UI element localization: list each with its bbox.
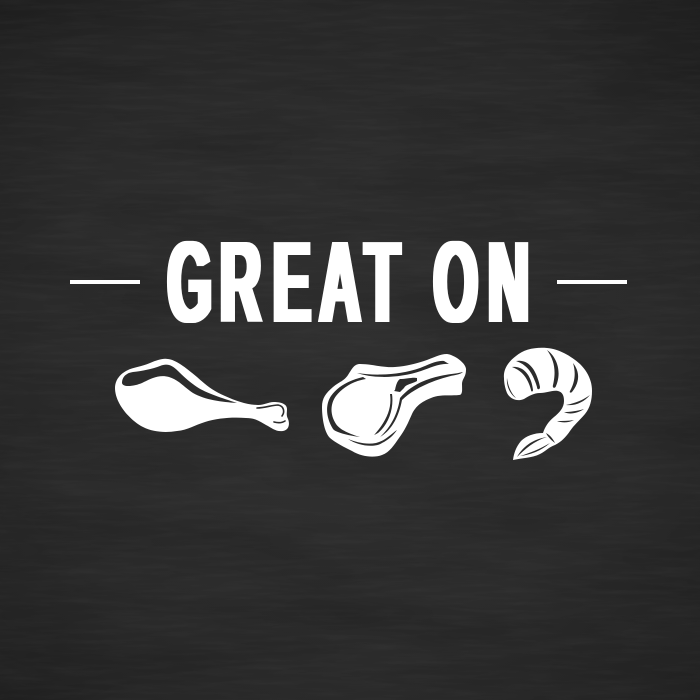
title: E — [273, 218, 311, 347]
title: O — [434, 218, 478, 347]
shrimp shell segments — [507, 350, 590, 457]
right rule — [557, 280, 627, 284]
title: G — [168, 218, 212, 347]
title: A — [319, 218, 361, 347]
title: N — [488, 218, 529, 347]
steak fat lines — [327, 361, 463, 446]
chicken joint lines — [257, 405, 285, 423]
icon: chicken drumstick — [115, 359, 289, 432]
title — [168, 218, 529, 347]
icon: shrimp — [504, 348, 592, 460]
title: R — [220, 218, 261, 347]
title: T — [365, 218, 400, 347]
left rule — [70, 280, 140, 284]
chicken shadow — [122, 365, 237, 403]
icon: steak — [322, 354, 466, 457]
